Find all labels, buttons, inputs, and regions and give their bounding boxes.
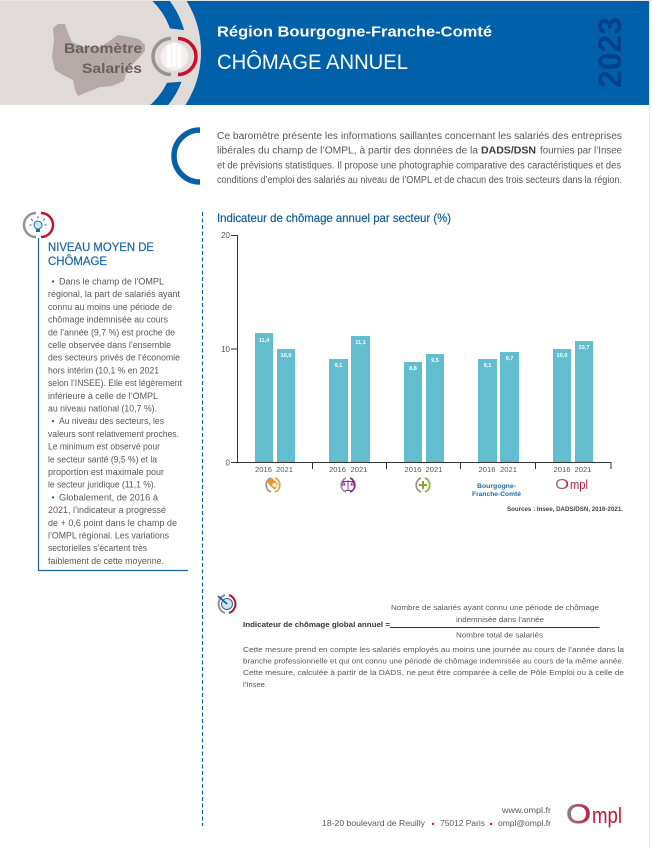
text block: analysis: faiblement de cette moyenne. <box>48 556 164 567</box>
icon: barometer logo <box>153 38 196 74</box>
bar values: 11,1 <box>355 340 366 346</box>
icon: intro arc <box>174 130 200 182</box>
text block: analysis: Le minimum est observé pour <box>48 442 161 453</box>
text block: analysis: selon l’INSEE). Elle est légèrement <box>48 378 182 389</box>
year labels: 2021 <box>276 465 293 474</box>
year labels: 2021 <box>426 465 442 474</box>
heading: region: Région Bourgogne-Franche-Comté <box>217 24 492 40</box>
icon: region map <box>52 24 145 96</box>
intro text: libérales du champ de l’OMPL, à partir des données de la <box>217 146 478 156</box>
label: Bourgogne-Franche-Comté: Franche-Comté <box>472 491 521 498</box>
logo: Ompl small: mpl <box>570 477 588 492</box>
formula: Nombre de salariés ayant connu une période de chômage <box>391 603 599 612</box>
heading: niveau moyen <box>48 242 154 268</box>
axis labels <box>221 231 231 468</box>
footer address: ompl@ompl.fr <box>498 818 551 828</box>
bar values: 10,0 <box>281 353 291 359</box>
intro text: et de prévisions statistiques. Il propose une photographie comparative des caractéristiques et des <box>217 160 621 172</box>
text block: analysis: le secteur juridique (11,1 %). <box>48 480 156 491</box>
icon: target <box>218 595 235 613</box>
logo: Ompl: O <box>566 799 591 829</box>
text block: analysis: de l’année (9,7 %) est proche de <box>48 327 175 338</box>
label: Bourgogne-Franche-Comté <box>472 483 521 498</box>
bars <box>255 333 593 462</box>
title: Baromètre Salariés: Baromètre <box>64 40 142 56</box>
text block: analysis: des secteurs privés de l’économie <box>48 353 180 364</box>
year labels: 2016 <box>329 465 346 474</box>
bar values: 10,0 <box>557 353 567 359</box>
icon: tag sector <box>266 478 280 492</box>
year 2023: 2023 <box>592 17 628 88</box>
intro text: fournies par l’Insee <box>540 146 622 156</box>
axis labels: 10 <box>221 345 231 354</box>
text block: definition <box>243 645 625 689</box>
icon: light bulb <box>24 213 53 237</box>
text block: analysis: valeurs sont relativement proches. <box>48 429 179 440</box>
footer address <box>322 805 551 828</box>
bar values: 9,1 <box>484 363 491 369</box>
text block: analysis: hors intérim (10,1 % en 2021 <box>48 365 159 376</box>
text block: analysis: chômage indemnisée au cours <box>48 315 168 326</box>
bar values: 9,5 <box>431 358 439 364</box>
icon: scales sector <box>341 478 355 492</box>
logo: Ompl small: O <box>555 476 569 493</box>
formula: indemnisée dans l’année <box>456 615 544 624</box>
year labels <box>255 465 591 474</box>
icon: health sector <box>416 478 430 492</box>
text block: analysis: régional, la part de salariés ayant <box>48 289 180 300</box>
heading: niveau moyen: NIVEAU MOYEN DE <box>48 242 154 254</box>
formula <box>243 603 600 640</box>
logo: Ompl small <box>555 476 588 493</box>
year labels: 2016 <box>255 465 272 474</box>
axis labels: 20 <box>221 231 231 240</box>
text block: definition: l’Insee. <box>243 680 267 689</box>
title: Baromètre Salariés: Salariés <box>82 60 142 76</box>
logo: Ompl: mpl <box>592 803 622 828</box>
axes <box>231 235 611 469</box>
bar values: 9,7 <box>506 356 513 362</box>
text block: analysis: Globalement, de 2016 à <box>59 492 159 503</box>
source note: Sources : Insee, DADS/DSN, 2016-2021. <box>507 506 623 513</box>
year labels: 2021 <box>500 465 517 474</box>
bar values <box>259 338 589 372</box>
axis labels: 0 <box>226 458 231 468</box>
formula: Indicateur de chômage global annuel = <box>243 620 391 629</box>
text block: analysis: l’OMPL régional. Les variations <box>48 530 169 542</box>
year labels: 2016 <box>479 465 495 474</box>
bar values: 10,7 <box>579 345 589 351</box>
panel: niveau moyen de chômage <box>24 213 188 570</box>
footer address: www.ompl.fr <box>501 805 551 815</box>
text block: analysis: Au niveau des secteurs, les <box>59 416 164 427</box>
bar values: 11,4 <box>259 338 270 344</box>
bar values: 9,1 <box>335 363 342 369</box>
text block: analysis: proportion est maximale pour <box>48 467 165 478</box>
title: Baromètre Salariés <box>64 40 142 76</box>
text block: analysis: 2021, l’indicateur a progressé <box>48 505 166 516</box>
heading: niveau moyen: CHÔMAGE <box>48 255 107 268</box>
header banner <box>0 1 649 105</box>
text block: analysis: Dans le champ de l’OMPL <box>59 276 165 288</box>
text block: analysis: celle observée dans l’ensemble <box>48 340 171 351</box>
text block: definition: Cette mesure, calculée à partir de la DADS, ne peut être comparée à celle de Pôle Emploi ou à celle de <box>243 668 624 677</box>
bar chart <box>221 231 611 474</box>
intro text <box>217 131 622 186</box>
logo: Ompl <box>566 799 622 829</box>
text block: analysis: au niveau national (10,7 %). <box>48 404 157 414</box>
label: Bourgogne-Franche-Comté: Bourgogne- <box>477 483 516 490</box>
text block: analysis: inférieure à celle de l’OMPL <box>48 391 159 402</box>
year labels: 2021 <box>351 465 367 474</box>
text block: analysis: connu au moins une période de <box>48 302 172 313</box>
footer address: 75012 Paris <box>440 818 485 828</box>
text block: analysis: de + 0,6 point dans le champ de <box>48 518 177 529</box>
year labels: 2021 <box>575 465 591 474</box>
intro text: DADS/DSN <box>481 146 536 156</box>
year labels: 2016 <box>554 465 570 474</box>
formula: Nombre total de salariés <box>456 630 543 640</box>
footer address: 18-20 boulevard de Reuilly <box>322 818 426 828</box>
intro text: Ce baromètre présente les informations saillantes concernant les salariés des entreprises <box>217 131 622 142</box>
text block: analysis: le secteur santé (9,5 %) et la <box>48 454 158 465</box>
heading: chômage annuel: CHÔMAGE ANNUEL <box>217 51 408 74</box>
text block: definition: Cette mesure prend en compte les salariés employés au moins une journée au cours de l’année dans la <box>243 645 625 654</box>
intro text: conditions d’emploi des salariés au niveau de l’OMPL et de chacun des trois secteurs dans la région. <box>217 175 622 186</box>
heading: chart title: Indicateur de chômage annuel par secteur (%) <box>217 211 451 225</box>
text block: definition: branche professionnelle et qui ont connu une période de chômage indemnisée au cours de la même année. <box>243 656 624 666</box>
text block: analysis: sectorielles s’écartent très <box>48 543 147 554</box>
text block: analysis <box>48 276 182 567</box>
bar values: 8,8 <box>409 366 417 372</box>
year labels: 2016 <box>405 465 421 474</box>
